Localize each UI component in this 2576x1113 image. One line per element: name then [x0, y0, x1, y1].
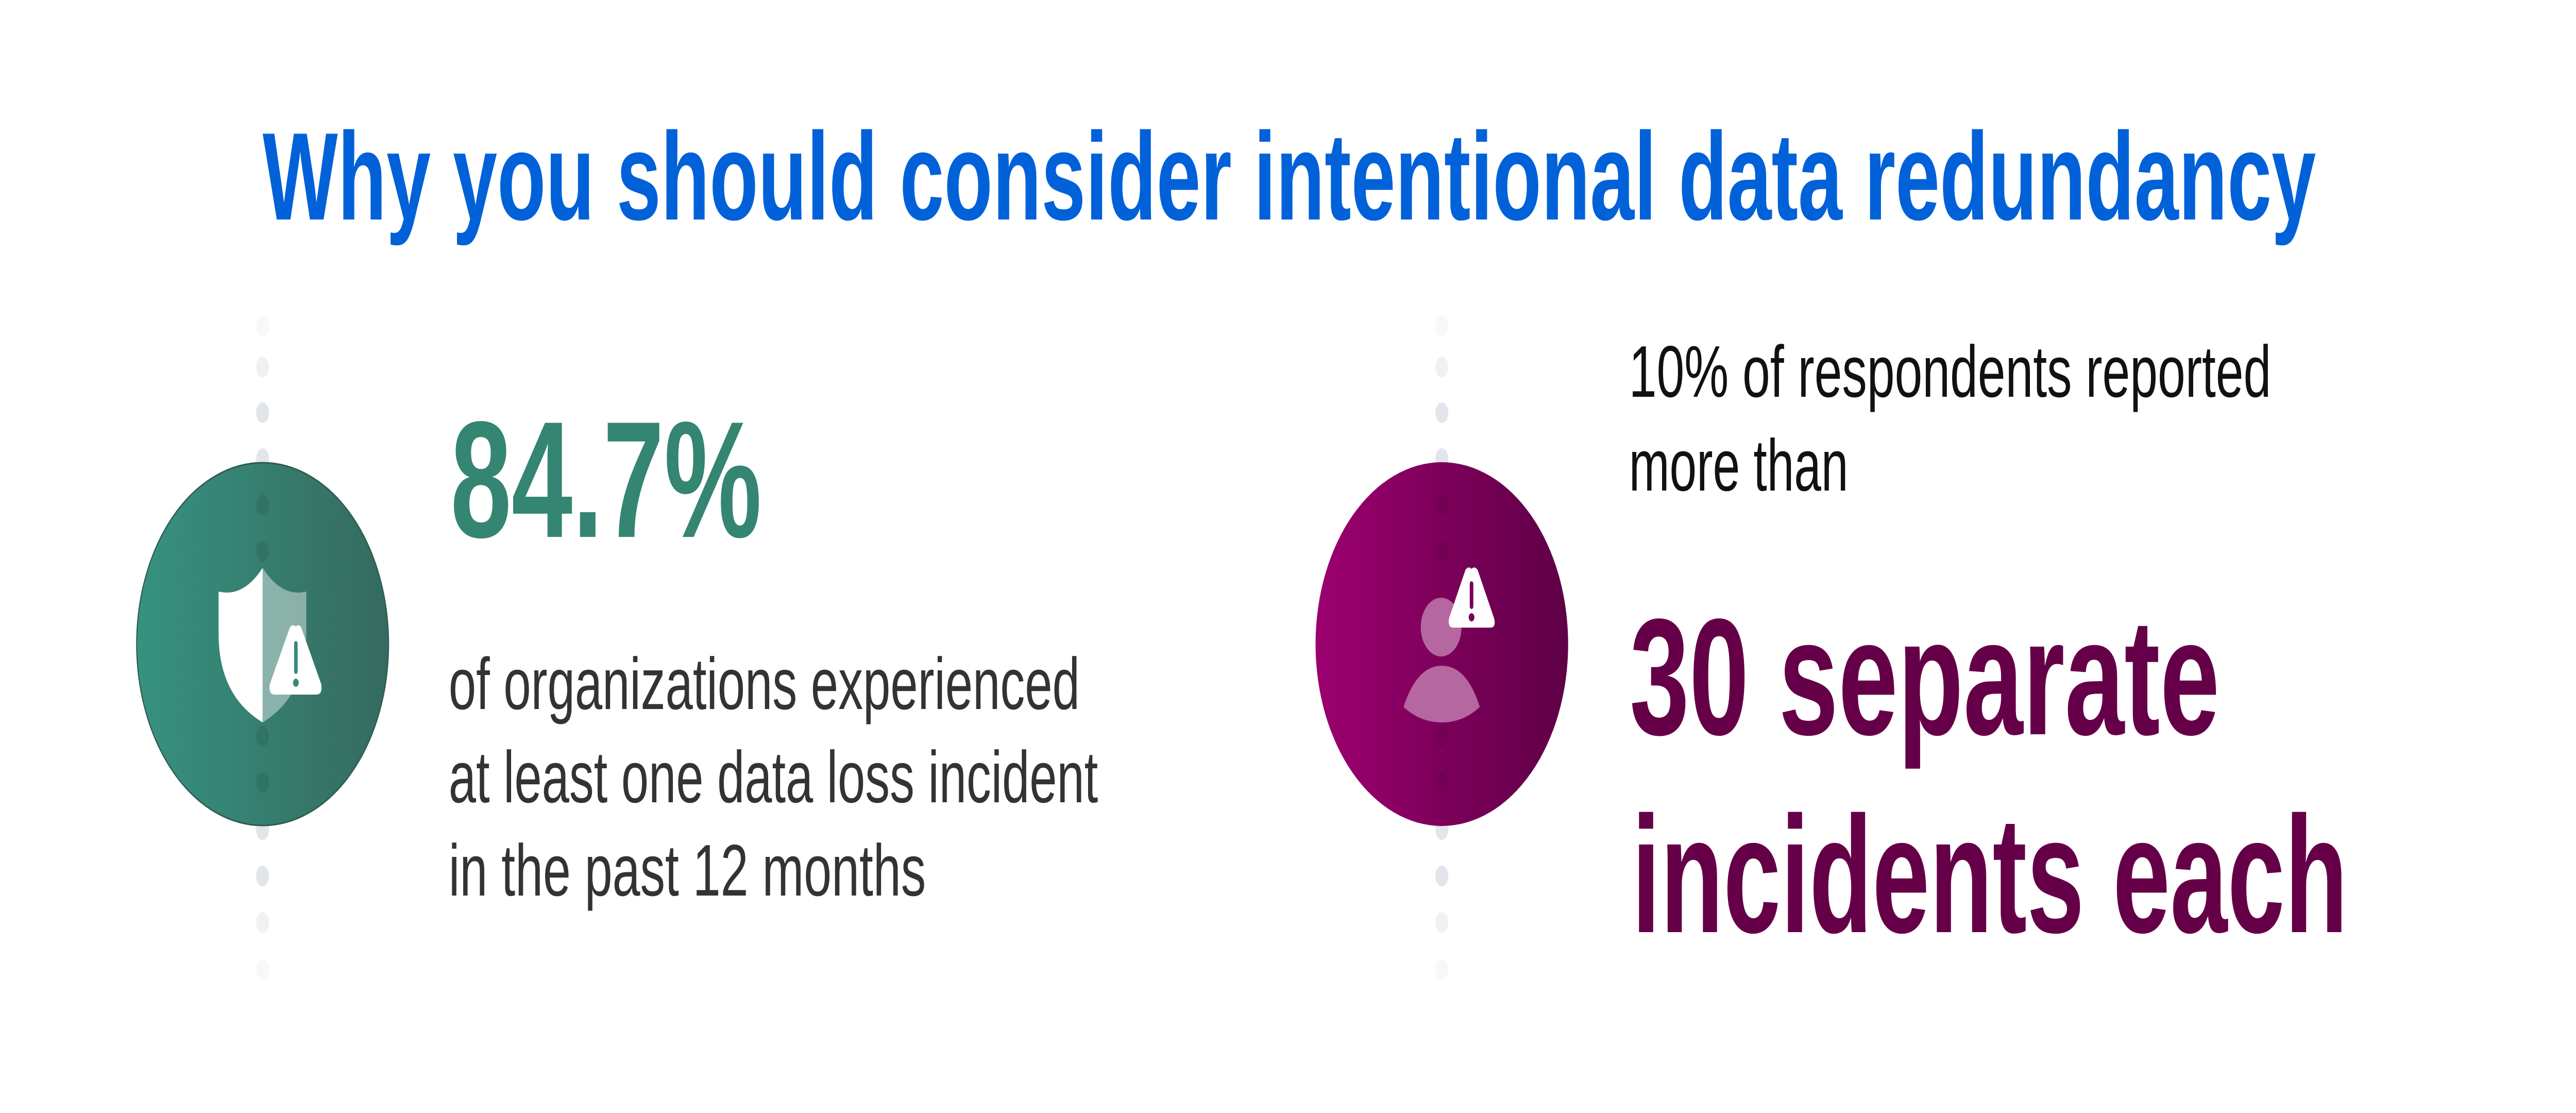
text block: left description: of organizations experienced [449, 643, 1080, 724]
dotted timeline: right [1435, 316, 1448, 980]
stat: 30 separate incidents each: 30 separate [1630, 584, 2219, 770]
stat: 30 separate incidents each [1630, 584, 2348, 968]
title: Why you should consider intentional data redundancy [263, 107, 2316, 246]
dotted timeline: left [256, 316, 269, 980]
stat: 84.7%: 84.7% [450, 386, 761, 572]
icon: purple circle with user warning [1315, 462, 1568, 826]
stat: 30 separate incidents each: incidents each [1632, 782, 2348, 968]
text block: right intro [1629, 330, 2271, 506]
text block: left description: in the past 12 months [449, 829, 926, 911]
text block: left description [449, 643, 1098, 911]
text block: right intro: 10% of respondents reported [1629, 330, 2271, 412]
text block: left description: at least one data loss incident [449, 736, 1098, 818]
icon: green circle with shield warning [137, 463, 388, 825]
text block: right intro: more than [1629, 424, 1848, 506]
